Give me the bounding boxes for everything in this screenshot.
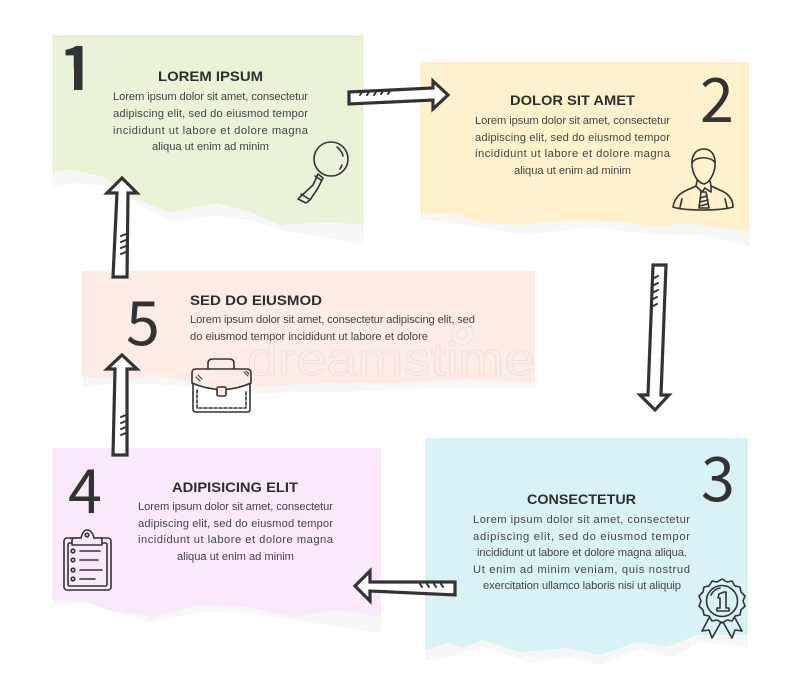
text block: lorem ipsum: incididunt ut labore et dolore magna [113, 125, 309, 137]
text block: dolor sit amet: Lorem ipsum dolor sit amet, consectetur [475, 115, 670, 127]
text block: lorem ipsum: adipiscing elit, sed do eiusmod tempor [113, 108, 308, 120]
text block: adipisicing elit [138, 501, 334, 563]
text block: consectetur: incididunt ut labore et dolore magna aliqua. [477, 547, 687, 559]
text block: consectetur [473, 514, 690, 592]
heading: lorem ipsum: LOREM IPSUM [158, 68, 263, 84]
text block: adipisicing elit: aliqua ut enim ad minim [177, 551, 294, 563]
text block: consectetur: Lorem ipsum dolor sit amet, consectetur [473, 514, 690, 526]
text block: consectetur: adipiscing elit, sed do eiusmod tempor [473, 531, 690, 543]
heading: adipisicing elit: ADIPISICING ELIT [172, 479, 298, 495]
text block: dolor sit amet: aliqua ut enim ad minim [514, 165, 631, 177]
arrow: step 5 to 1 [107, 178, 137, 277]
text block: consectetur: exercitation ullamco laboris nisi ut aliquip [483, 580, 681, 592]
arrow: step 1 to 2 [349, 81, 448, 109]
panel 1: lorem ipsum [52, 19, 364, 245]
text block: dolor sit amet: incididunt ut labore et dolore magna [475, 148, 671, 160]
panel 2: dolor sit amet [420, 51, 749, 247]
text block: lorem ipsum: Lorem ipsum dolor sit amet, consectetur [113, 91, 308, 103]
text block: sed do eiusmod: do eiusmod tempor incididunt ut labore et dolore [190, 331, 428, 343]
text block: consectetur: Ut enim ad minim veniam, quis nostrud [473, 564, 690, 576]
watermark: dreamstime [247, 333, 535, 385]
text block: adipisicing elit: adipiscing elit, sed do eiusmod tempor [138, 518, 333, 530]
text block: sed do eiusmod [190, 314, 475, 343]
heading: consectetur: CONSECTETUR [527, 491, 636, 507]
text block: dolor sit amet [475, 115, 671, 177]
icon: award rosette [699, 579, 745, 638]
panel 3: consectetur [425, 430, 748, 665]
text block: adipisicing elit: incididunt ut labore et dolore magna [138, 534, 334, 546]
icon: briefcase [192, 359, 251, 412]
arrow: step 4 to 5 [107, 355, 137, 455]
icon: businessman [673, 149, 733, 210]
number 2: 2 [700, 51, 734, 140]
text block: adipisicing elit: Lorem ipsum dolor sit amet, consectetur [138, 501, 333, 513]
text block: lorem ipsum: aliqua ut enim ad minim [152, 141, 269, 153]
watermark [247, 323, 535, 385]
heading: dolor sit amet: DOLOR SIT AMET [510, 92, 635, 108]
text block: dolor sit amet: adipiscing elit, sed do eiusmod tempor [475, 132, 670, 144]
number 3: 3 [701, 430, 735, 519]
text block: sed do eiusmod: Lorem ipsum dolor sit amet, consectetur adipiscing elit, sed [190, 314, 475, 326]
number 4: 4 [68, 442, 102, 531]
panel 4: adipisicing elit [52, 442, 381, 633]
text block: lorem ipsum [113, 91, 309, 153]
panel 5: sed do eiusmod [82, 271, 535, 412]
arrow: step 3 to 4 [355, 571, 455, 601]
icon: clipboard [64, 530, 111, 590]
icon: magnifying glass [298, 142, 348, 203]
arrow: step 2 to 3 [640, 265, 669, 410]
number 1: 1 [59, 19, 95, 108]
heading: sed do eiusmod: SED DO EIUSMOD [190, 292, 322, 308]
number 5: 5 [126, 274, 160, 363]
